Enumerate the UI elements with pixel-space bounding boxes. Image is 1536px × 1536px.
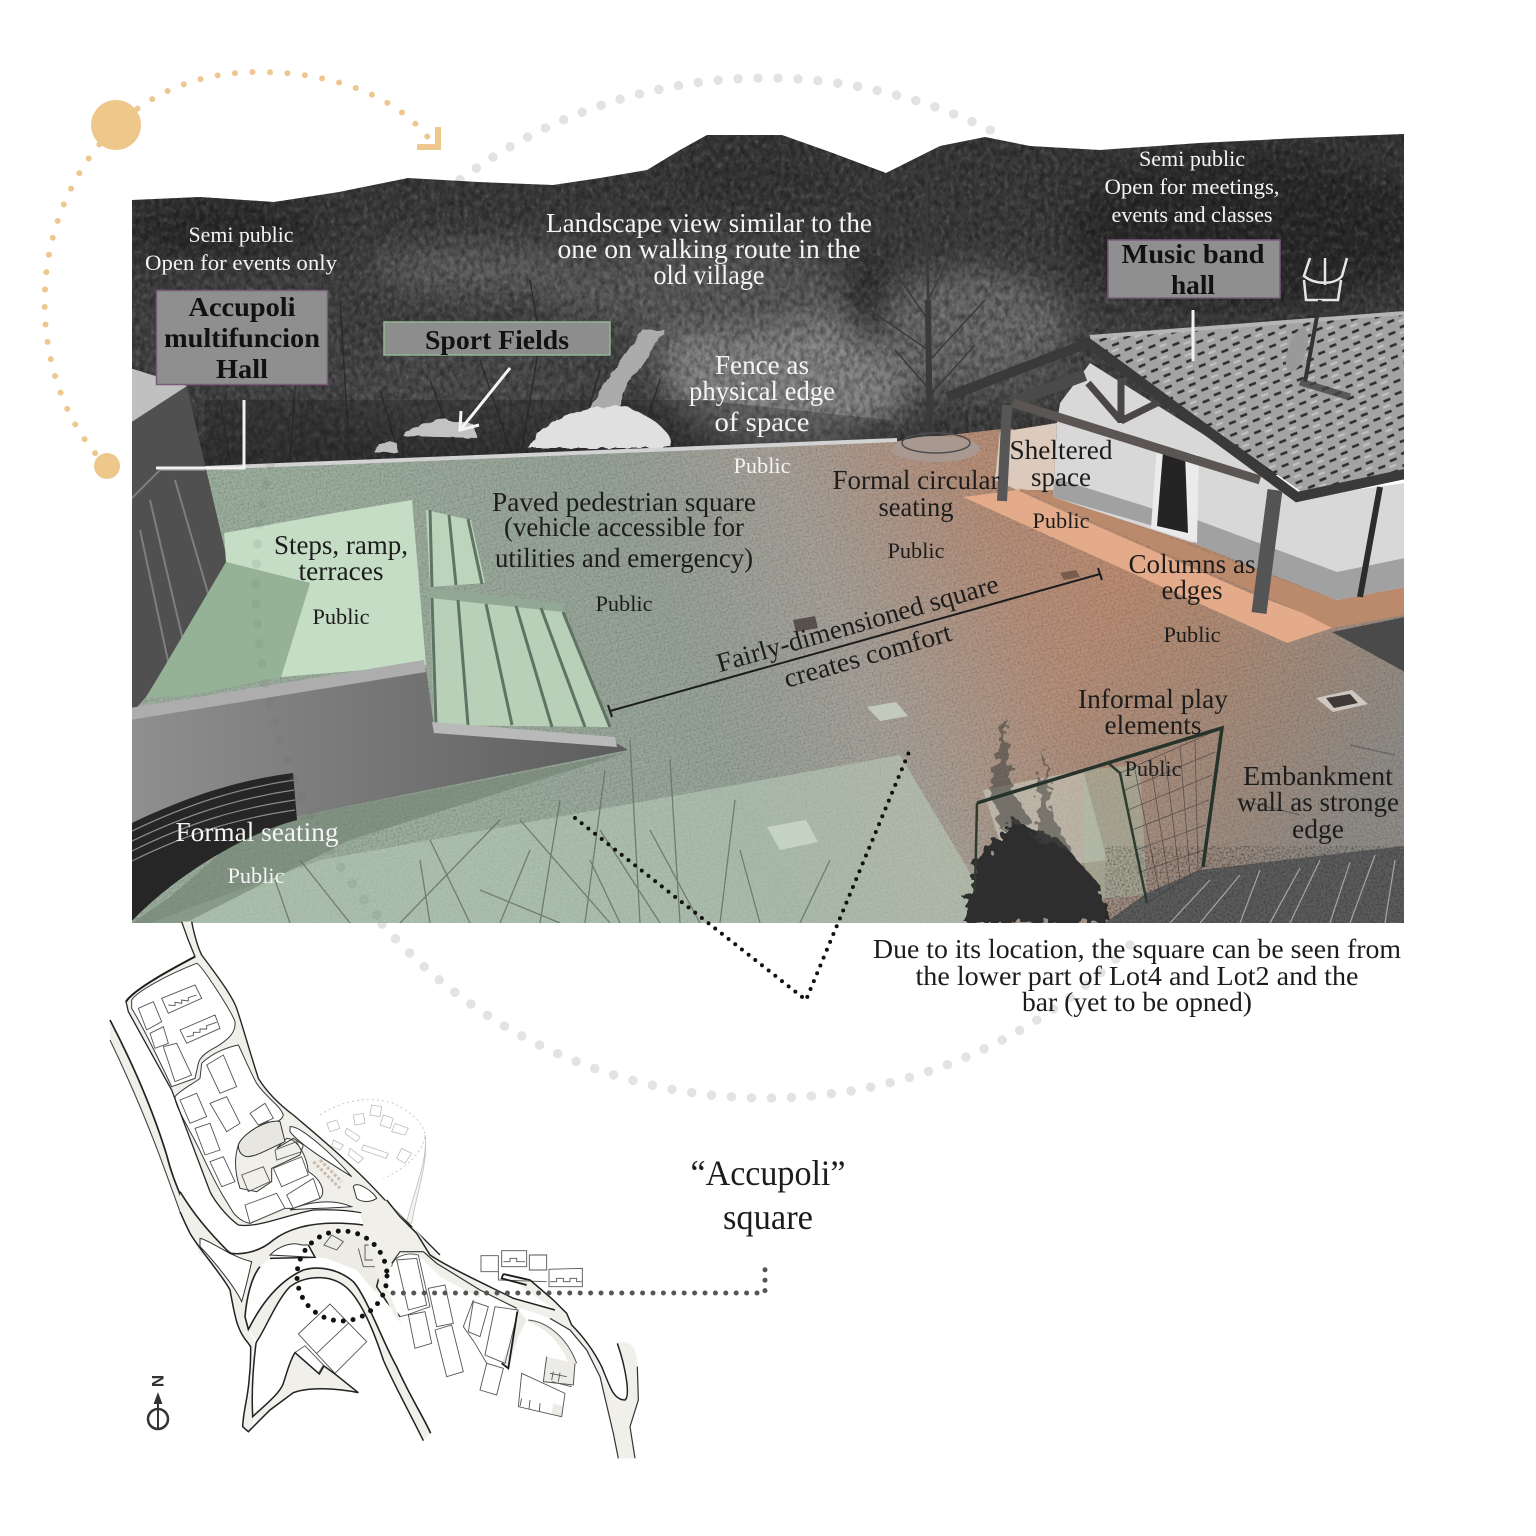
leader line: music hall [1192,310,1194,361]
map: northern estate [110,922,440,1255]
photo: manhole covers [767,570,1368,850]
text: paved pedestrian square [492,487,756,616]
icon: north arrow: N [148,1375,167,1387]
heading box: music band hall [1108,239,1280,300]
text: fence as edge [689,350,835,478]
text: visibility note: Due to its location, the square can be seen from [873,934,1401,964]
heading box: Accupoli multifunction hall: Hall [216,354,269,384]
text: columns as edges: Public [1164,622,1221,647]
photo: retaining wall [132,660,628,823]
text: steps ramp terraces: terraces [298,556,384,586]
text: embankment wall: wall as stronge [1237,787,1399,817]
text: paved pedestrian square: utilities and emergency) [495,543,753,573]
text: columns as edges: Columns as [1128,549,1256,579]
site plan map [110,922,638,1458]
heading: Accupoli square: square [723,1197,813,1237]
heading: Accupoli square: “Accupoli” [690,1153,846,1193]
text: music hall access note: Semi public [1139,146,1245,171]
photo: left building [130,368,228,715]
text: landscape view: old village [654,260,765,290]
text: steps ramp terraces [274,530,408,629]
map: dotted locator circle [297,1231,387,1321]
heading: Accupoli square [690,1153,846,1237]
text: formal circular seating: Formal circular [832,465,1000,495]
text: columns as edges [1128,549,1256,647]
heading box: Accupoli multifunction hall: multifuncion [164,323,320,353]
text: steps ramp terraces: Steps, ramp, [274,530,408,560]
text: sheltered space: Sheltered [1010,435,1113,465]
text: fence as edge: of space [714,407,810,437]
text: paved pedestrian square: Public [596,591,653,616]
panel: annotated photo of the square [120,130,1430,930]
text: landscape view: Landscape view similar to the [546,208,872,238]
text: fence as edge: Public [734,453,791,478]
text: formal circular seating [832,465,1000,563]
text: embankment wall [1237,761,1399,844]
heading box: Accupoli multifunction hall [156,290,328,384]
photo: sports dome and access path [374,330,672,452]
text: informal play elements: elements [1104,710,1202,740]
icon: north arrow [148,1375,168,1430]
text: fence as edge: physical edge [689,376,835,406]
text: embankment wall: edge [1292,814,1344,844]
text: sheltered space [1010,435,1113,533]
text: formal seating [176,817,338,888]
arrow: to sport fields [460,368,510,430]
faint dots showing through photo [252,464,382,920]
text: steps ramp terraces: Public [312,604,370,629]
text: visibility note: the lower part of Lot4 and Lot2 and the [916,961,1359,991]
heading box: music band hall: Music band [1122,239,1264,269]
text: landscape view [546,208,872,290]
text: informal play elements: Informal play [1078,684,1229,714]
map: central junction and arc road [180,1192,480,1441]
text: hall access note [145,222,337,275]
text: informal play elements [1078,684,1229,781]
heading box: sport fields [384,322,610,355]
text: hall access note: Semi public [188,222,294,247]
text: formal seating: Public [228,863,285,888]
text: visibility note [873,934,1401,1017]
photo: curved bench [130,773,297,923]
text: music hall access note: Open for meetings, [1104,174,1280,199]
text: paved pedestrian square: Paved pedestrian square [492,487,756,517]
map: buildings around the square [295,1235,377,1373]
text: columns as edges: edges [1162,575,1222,605]
photo: shrubs and grass [275,715,1405,924]
photo: bare tree [870,158,985,458]
dotted leader from map to label [393,1268,765,1293]
text: informal play elements: Public [1124,756,1182,781]
text: music hall access note: events and classes [1112,202,1272,227]
heading box: Accupoli multifunction hall: Accupoli [188,292,296,322]
text: paved pedestrian square: (vehicle accessible for [504,512,744,542]
photo: bare trees [220,280,660,460]
text: fairly dimensioned square: Fairly-dimensioned square [713,569,1002,678]
photo: mountain background [120,130,1430,475]
dotted view-cone marker [575,752,909,1000]
text: formal seating: Formal seating [176,817,338,847]
dimension line across the square [608,568,1102,717]
photo: music band hall [947,313,1405,672]
decorative grey dotted circle [256,78,1130,1098]
photo: paved square ground [132,428,1404,923]
text: formal circular seating: seating [878,492,954,522]
text: visibility note: bar (yet to be opned) [1022,987,1252,1017]
photo: terraces and ramp [146,500,610,727]
text: formal circular seating: Public [888,538,945,563]
map: south-east buildings [392,1251,582,1417]
text: fairly dimensioned square: creates comfort [780,617,955,694]
text: fence as edge: Fence as [715,350,809,380]
text: landscape view: one on walking route in the [558,234,861,264]
text: hall access note: Open for events only [145,250,337,275]
heading box: sport fields: Sport Fields [425,325,569,355]
text: embankment wall: Embankment [1243,761,1394,791]
map: south-east estate [360,1200,638,1458]
photo: antenna and dish [1281,258,1350,397]
heading box: music band hall: hall [1171,270,1215,300]
photo: circular seating [892,433,980,462]
text: sheltered space: space [1031,462,1091,492]
photo: football goal [975,728,1222,903]
leader line: hall [156,400,244,468]
text: sheltered space: Public [1032,508,1090,533]
map: faded neighbouring buildings [320,1100,426,1223]
text: music hall access note [1104,146,1280,227]
orange dotted arc with circles and arrowhead [45,72,438,479]
